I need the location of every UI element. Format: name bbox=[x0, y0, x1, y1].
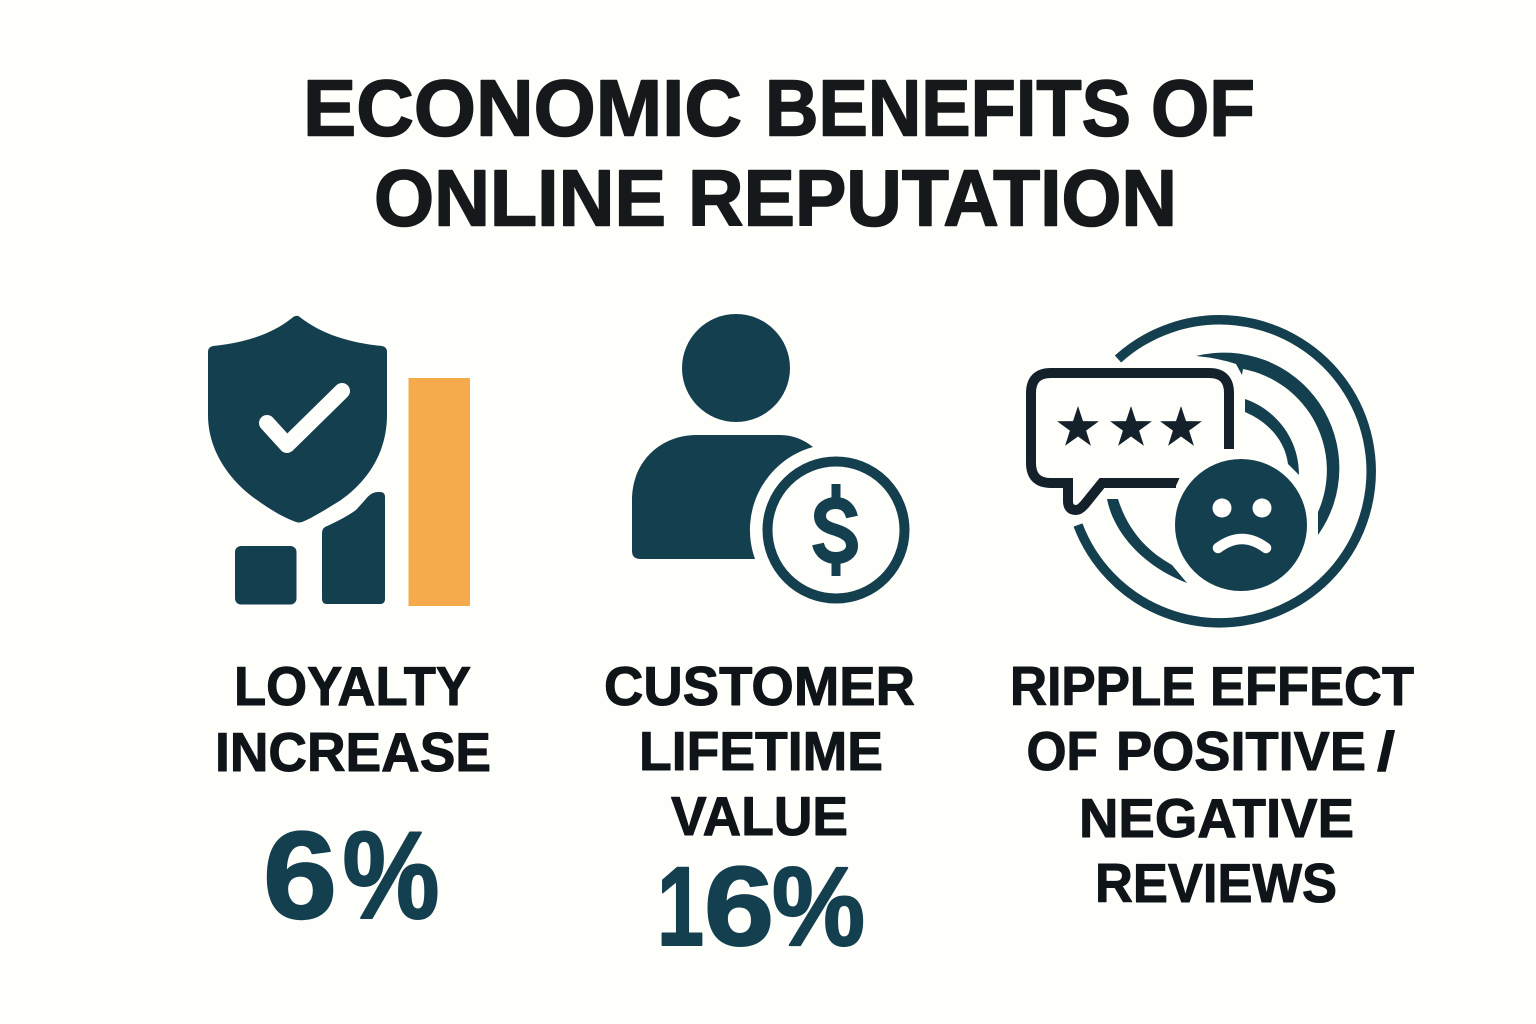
stat: 16% bbox=[657, 844, 865, 969]
label: loyalty increase: LOYALTY bbox=[234, 655, 471, 717]
title: ONLINE bbox=[374, 154, 666, 242]
title: REPUTATION bbox=[688, 154, 1177, 242]
icon: shield with check and bar chart bbox=[208, 316, 470, 606]
label: customer lifetime value: CUSTOMER bbox=[604, 655, 915, 717]
label: ripple effect of positive / negative reviews: POSITIVE bbox=[1116, 720, 1366, 782]
label: loyalty increase bbox=[215, 655, 491, 783]
title: OF bbox=[1151, 64, 1255, 152]
label: ripple effect of positive / negative reviews: / bbox=[1377, 720, 1395, 782]
stat: 6%: % bbox=[342, 807, 440, 945]
title: BENEFITS bbox=[765, 64, 1131, 152]
stat: 16%: 6 bbox=[704, 844, 774, 969]
label: ripple effect of positive / negative reviews: NEGATIVE bbox=[1079, 787, 1354, 849]
label: ripple effect of positive / negative reviews bbox=[1010, 655, 1414, 914]
label: ripple effect of positive / negative reviews: RIPPLE bbox=[1010, 655, 1196, 717]
stat: 16%: 1 bbox=[657, 844, 704, 969]
icon: person with dollar coin bbox=[632, 314, 904, 598]
label: ripple effect of positive / negative reviews: REVIEWS bbox=[1095, 852, 1337, 914]
panel: ripple effect of reviews bbox=[1010, 320, 1414, 914]
panel: loyalty increase bbox=[208, 316, 491, 945]
label: customer lifetime value bbox=[604, 655, 915, 847]
stat: 6% bbox=[263, 807, 440, 945]
label: customer lifetime value: VALUE bbox=[671, 785, 848, 847]
label: customer lifetime value: LIFETIME bbox=[639, 720, 883, 782]
icon: ripple rings, review bubble and sad face bbox=[1031, 320, 1371, 623]
stat: 16%: % bbox=[772, 844, 865, 969]
panel: customer lifetime value bbox=[604, 314, 915, 969]
title: ECONOMIC bbox=[303, 64, 742, 152]
stat: 6%: 6 bbox=[263, 807, 337, 945]
label: ripple effect of positive / negative reviews: OF bbox=[1026, 720, 1098, 782]
title bbox=[303, 64, 1255, 242]
label: ripple effect of positive / negative reviews: EFFECT bbox=[1210, 655, 1414, 717]
label: loyalty increase: INCREASE bbox=[215, 721, 491, 783]
